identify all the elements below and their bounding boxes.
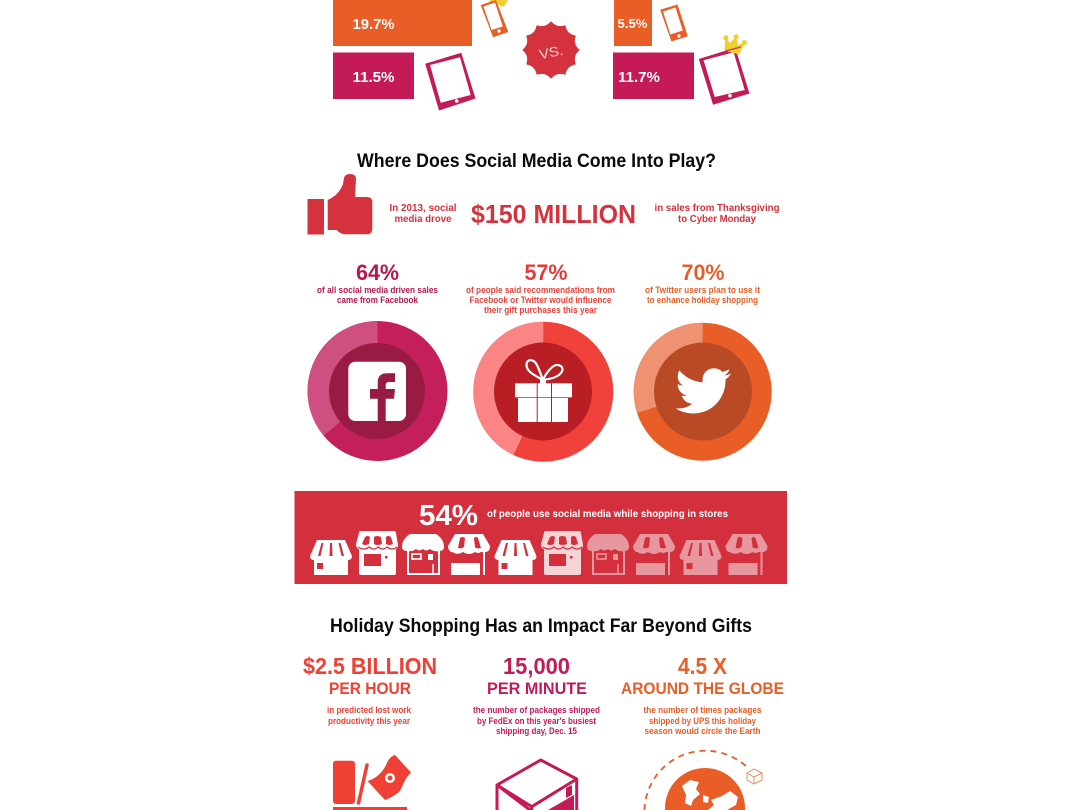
- stat: ups globe: shipped by UPS this holiday: [649, 716, 756, 726]
- icon: facebook: [348, 362, 406, 421]
- heading: social media: Where Does Social Media Come Into Play?: [357, 151, 716, 172]
- stat: twitter 70 percent: to enhance holiday shopping: [647, 295, 758, 305]
- panel: 54 percent banner: [294, 491, 787, 584]
- icon: open package box: [497, 760, 577, 810]
- stat: lost productivity: productivity this year: [328, 716, 411, 726]
- stat: twitter 70 percent: [645, 260, 760, 305]
- panel: device comparison: [333, 0, 749, 110]
- badge: versus: [523, 22, 579, 78]
- bar: left phone share: 19.7%: [352, 16, 394, 33]
- bar: right tablet share: 11.7%: [618, 69, 660, 86]
- bar: right tablet share: [613, 52, 694, 99]
- text: 150 million: $150 MILLION: [471, 199, 636, 229]
- stat: fedex packages: shipping day, Dec. 15: [496, 726, 577, 736]
- text: in 2013: media drove: [394, 213, 452, 225]
- stat: facebook 64 percent: 64%: [356, 260, 399, 285]
- bar: left tablet share: [333, 52, 414, 99]
- bar: left tablet share: 11.5%: [352, 69, 394, 86]
- text: in sales: in sales from Thanksgiving: [654, 202, 780, 214]
- text: in 2013: [390, 202, 457, 225]
- chart: facebook donut: [308, 321, 448, 461]
- stat: facebook 64 percent: came from Facebook: [337, 295, 418, 305]
- stat: fedex packages: PER MINUTE: [487, 679, 587, 698]
- icon: right phone: [661, 5, 687, 41]
- stat: ups globe: 4.5 X: [678, 653, 728, 679]
- stat: gift 57 percent: Facebook or Twitter would influence: [470, 295, 612, 305]
- text: 54 percent: 54%: [419, 500, 478, 532]
- stat: facebook 64 percent: of all social media driven sales: [317, 285, 438, 295]
- bar: left phone share: [333, 0, 472, 46]
- icon: left tablet: [426, 53, 475, 110]
- chart: gift donut: [473, 322, 613, 462]
- text: banner caption: of people use social media while shopping in stores: [487, 508, 728, 520]
- stat: ups globe: [621, 653, 784, 736]
- icon: twitter bird: [676, 368, 731, 413]
- icon: small package: [747, 769, 762, 784]
- stat: fedex packages: by FedEx on this year's busiest: [477, 716, 596, 726]
- stat: ups globe: the number of times packages: [644, 705, 762, 715]
- stat: twitter 70 percent: of Twitter users plan to use it: [645, 285, 760, 295]
- stat: gift 57 percent: their gift purchases this year: [484, 305, 598, 315]
- stat: lost productivity: in predicted lost work: [327, 705, 411, 715]
- stat: twitter 70 percent: 70%: [682, 260, 724, 285]
- icon: gift: [515, 360, 572, 422]
- stat: ups globe: AROUND THE GLOBE: [621, 679, 784, 698]
- stat: facebook 64 percent: [317, 260, 438, 305]
- heading: holiday shopping: Holiday Shopping Has an Impact Far Beyond Gifts: [330, 616, 752, 637]
- icon: left phone with crown: [481, 0, 514, 37]
- bar: right phone share: 5.5%: [618, 16, 648, 31]
- stat: lost productivity: $2.5 BILLION: [303, 653, 437, 679]
- stat: gift 57 percent: 57%: [524, 260, 568, 285]
- text: in 2013: In 2013, social: [390, 202, 457, 214]
- stat: gift 57 percent: of people said recommendations from: [466, 285, 615, 295]
- icon: row of stores: [310, 531, 768, 575]
- stat: fedex packages: [473, 653, 600, 736]
- icon: globe with dashed orbit: [644, 751, 762, 810]
- badge: versus: VS.: [538, 43, 564, 62]
- stat: fedex packages: 15,000: [503, 653, 570, 679]
- text: in sales: [654, 202, 780, 225]
- icon: right tablet with crown: [699, 31, 749, 104]
- stat: ups globe: season would circle the Earth: [644, 726, 760, 736]
- panel: 150 million stat: [308, 174, 780, 234]
- chart: twitter donut: [634, 323, 772, 461]
- stat: gift 57 percent: [466, 260, 615, 315]
- bar: right phone share: [614, 0, 652, 46]
- icon: money into slot: [333, 755, 411, 810]
- stat: lost productivity: PER HOUR: [329, 679, 411, 698]
- stat: fedex packages: the number of packages shipped: [473, 705, 600, 715]
- text: in sales: to Cyber Monday: [678, 213, 756, 225]
- stat: lost productivity: [303, 653, 437, 726]
- icon: thumbs up: [308, 174, 372, 234]
